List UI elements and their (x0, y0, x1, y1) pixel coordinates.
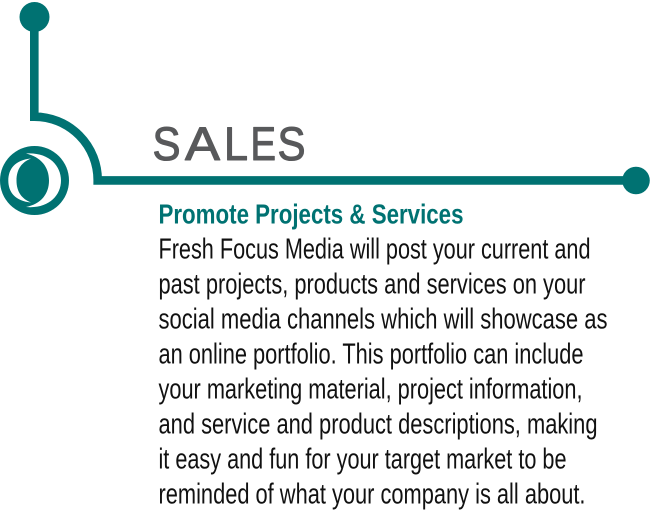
title (152, 117, 306, 170)
connector line with end dots (20, 2, 650, 194)
subheading: Promote Projects & Services (158, 198, 464, 230)
title: S (278, 117, 306, 170)
title: A (185, 117, 221, 170)
icon: circular logo (0, 146, 69, 215)
title: E (250, 117, 276, 170)
body text (158, 234, 608, 510)
title: S (152, 117, 180, 170)
title: L (224, 117, 248, 170)
